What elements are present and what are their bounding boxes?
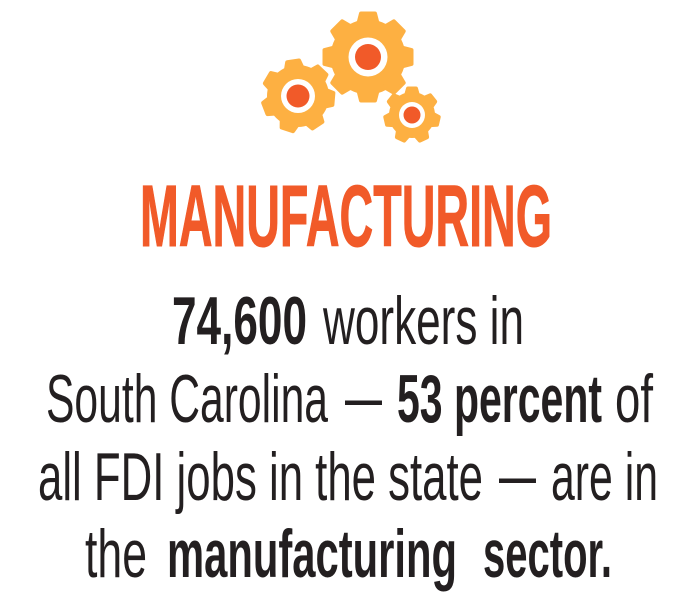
line 2: South Carolina — [46, 361, 328, 437]
icon: three gears — [262, 14, 439, 142]
line 4: the — [85, 516, 147, 592]
line 1: 74,600 — [172, 283, 307, 359]
line 2: of — [615, 361, 653, 437]
body text — [38, 283, 658, 592]
line 2: — — [345, 359, 382, 435]
icon: right gear — [385, 88, 439, 142]
line 1 — [172, 283, 524, 359]
line 1: workers in — [322, 283, 524, 359]
line 4: manufacturing — [167, 516, 457, 592]
line 3: — — [499, 437, 536, 513]
icon: left gear — [262, 60, 334, 132]
icon: large gear — [324, 14, 412, 100]
